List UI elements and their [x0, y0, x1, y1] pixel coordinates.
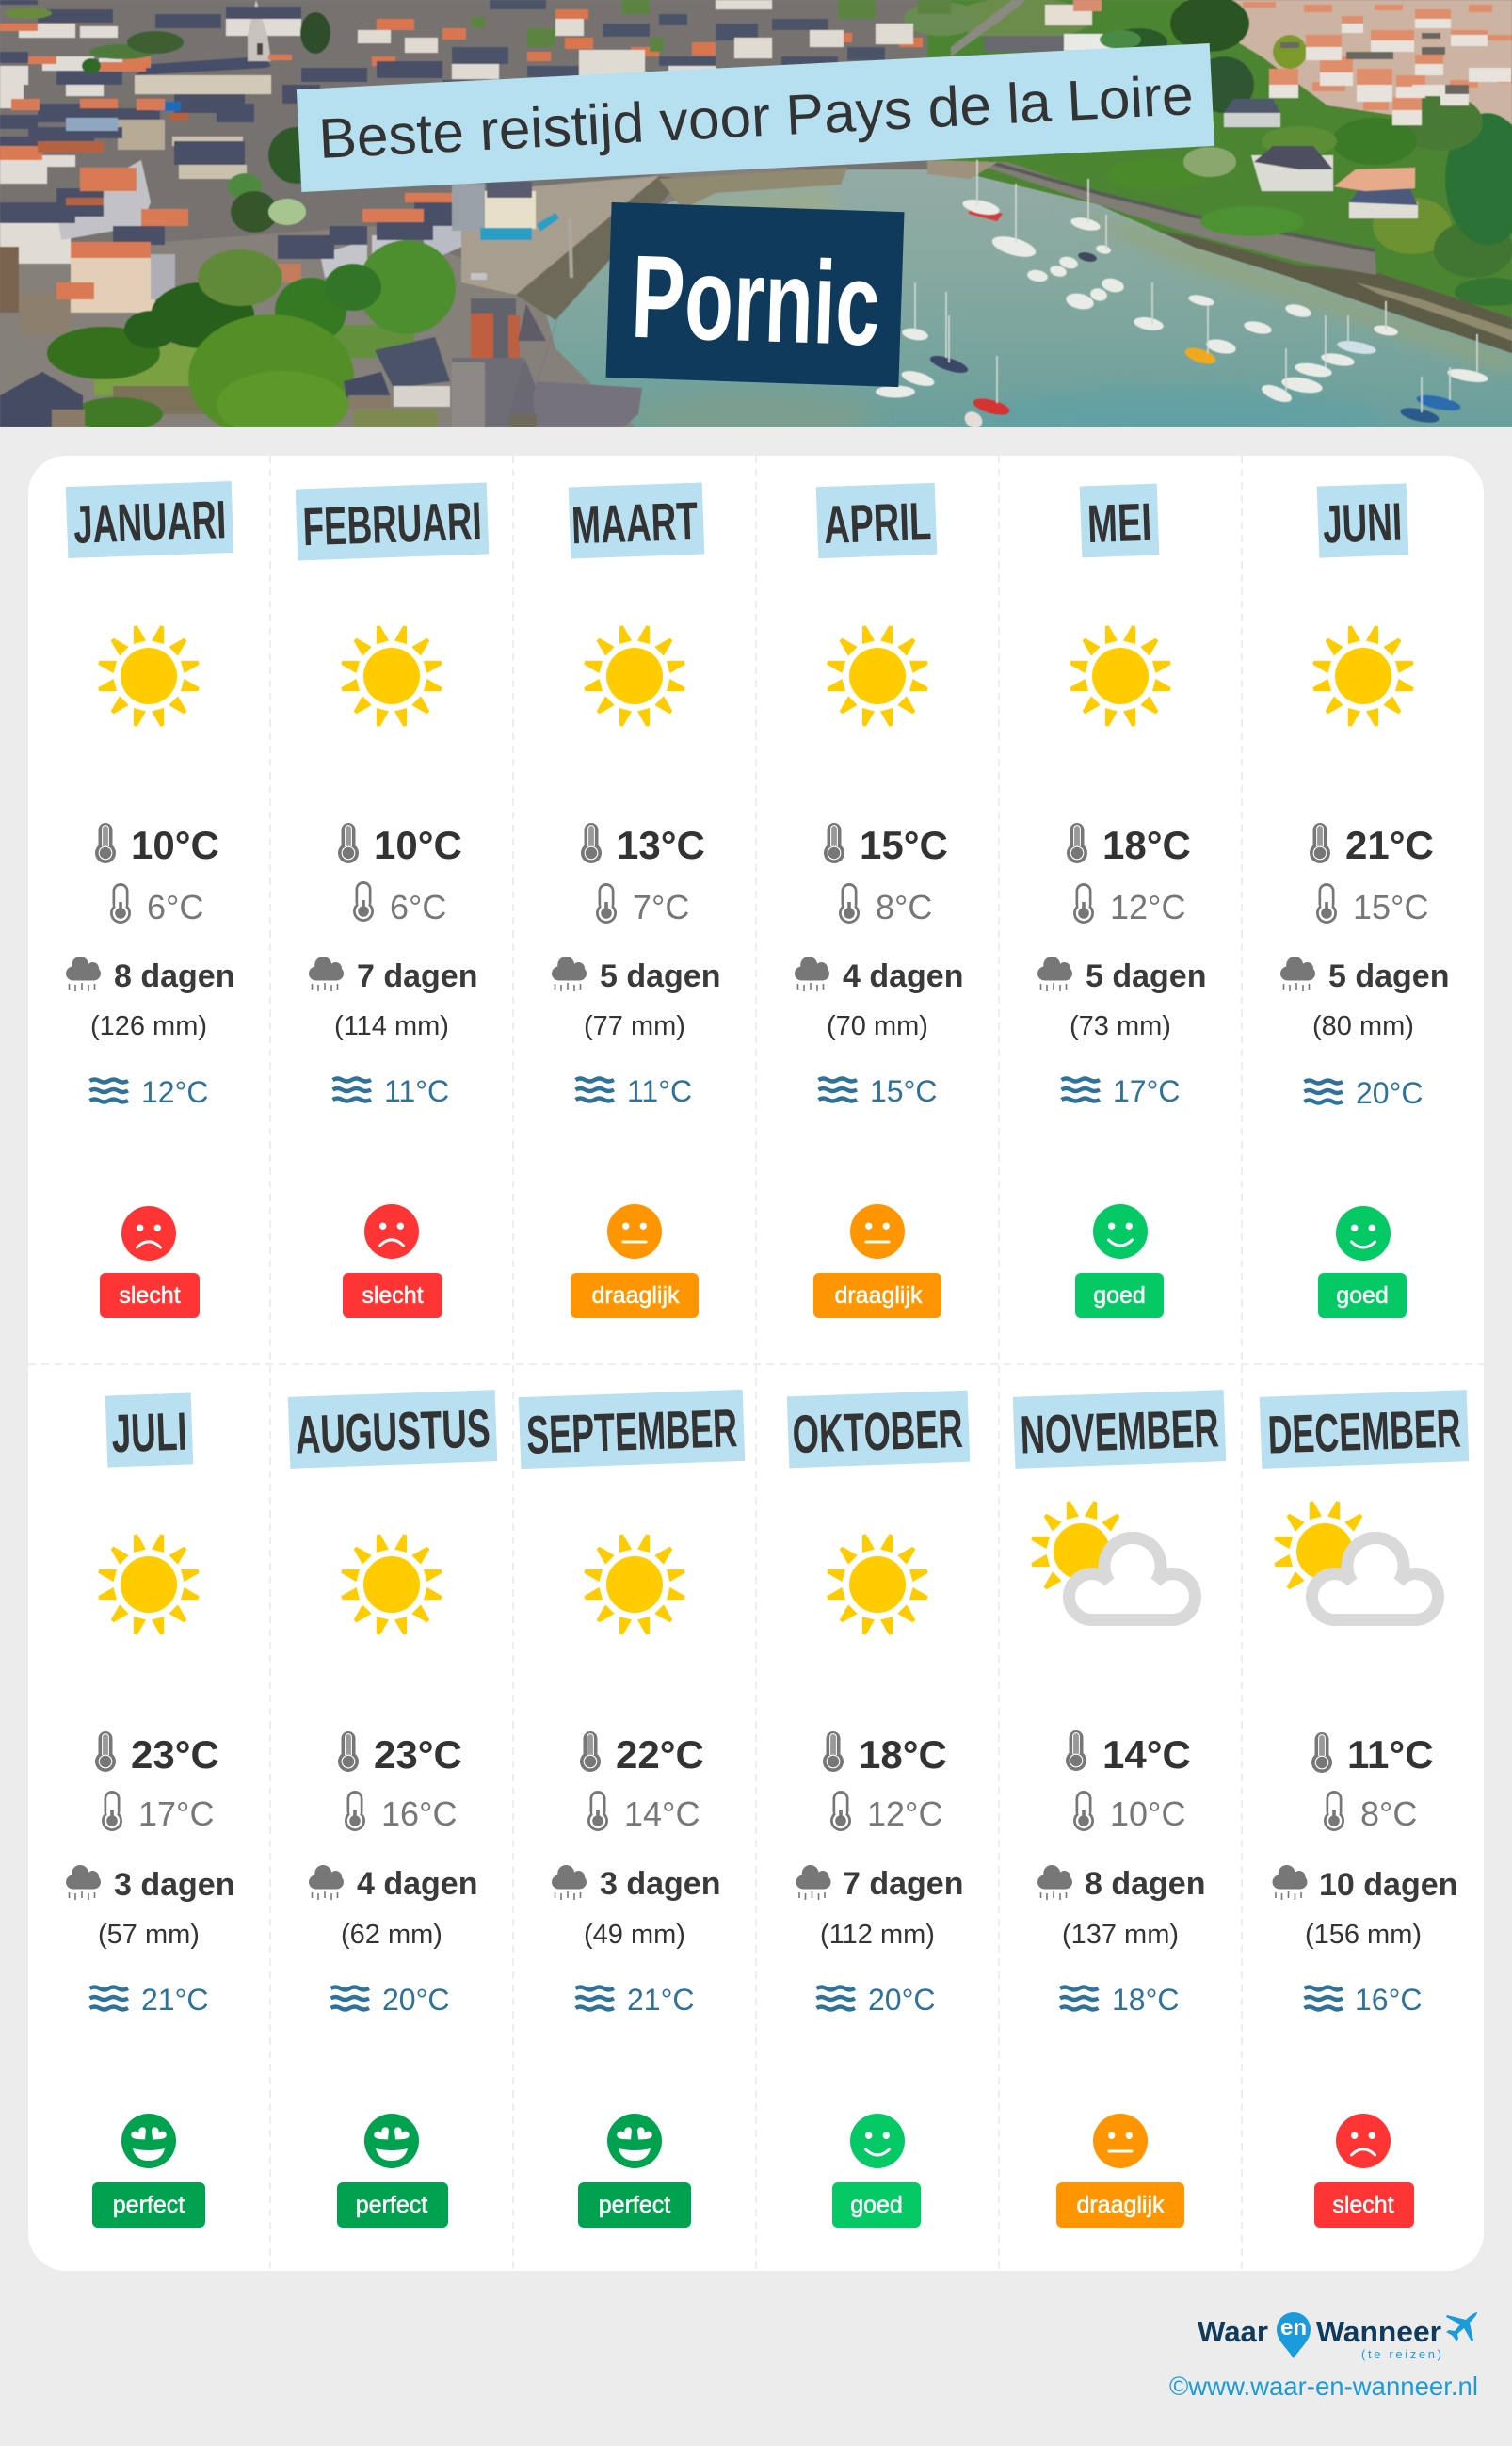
sea temperature: 20°C [1356, 1076, 1424, 1110]
month column: januari [66, 481, 234, 1318]
month label: AUGUSTUS [295, 1398, 491, 1466]
icon: sun [340, 1533, 443, 1636]
rating: goed [832, 2114, 921, 2228]
month column: december [1260, 1390, 1469, 2228]
rain days [795, 957, 963, 994]
month label: FEBRUARI [302, 491, 483, 557]
month label: APRIL [823, 491, 932, 555]
rainfall: (80 mm) [1312, 1011, 1414, 1041]
sea temperature [817, 1983, 936, 2017]
min temperature: 6°C [390, 888, 446, 926]
month label [816, 483, 937, 558]
month column: februari [296, 482, 489, 1318]
title banner: Beste reistijd voor Pays de la Loire [317, 63, 1195, 170]
rainfall: (49 mm) [584, 1920, 685, 1950]
rain days: 7 dagen [843, 1866, 963, 1902]
left town walls [0, 19, 301, 264]
sea temperature: 21°C [141, 1983, 209, 2017]
rainfall: (156 mm) [1305, 1920, 1422, 1950]
month column: april [795, 483, 963, 1318]
title banner [297, 43, 1214, 192]
month label [296, 482, 489, 561]
max temperature [1066, 1730, 1191, 1777]
min temperature: 17°C [138, 1794, 214, 1833]
sea temperature [1305, 1983, 1422, 2017]
rating: draaglijk [813, 1204, 941, 1318]
month label: MAART [571, 491, 699, 555]
rainfall: (114 mm) [334, 1011, 449, 1041]
rain days: 8 dagen [1085, 1866, 1205, 1902]
rating: goed: goed [1336, 1282, 1389, 1309]
rating: goed [1318, 1206, 1407, 1318]
max temperature: 23°C [374, 1732, 462, 1777]
max temperature: 14°C [1102, 1732, 1191, 1777]
rain days [66, 1865, 234, 1903]
month label: MEI [1086, 492, 1152, 555]
sea temperature: 21°C [627, 1983, 695, 2017]
rating: draaglijk: draaglijk [591, 1282, 680, 1309]
month label [288, 1390, 497, 1469]
min temperature: 12°C [1110, 888, 1185, 926]
min temperature: 8°C [1360, 1794, 1417, 1833]
rating: perfect: perfect [113, 2192, 185, 2218]
bottom houses [0, 372, 83, 427]
city name block: Pornic [606, 202, 904, 387]
logo: Waar en Wanneer: Wanneer [1316, 2315, 1441, 2348]
max temperature [580, 1731, 704, 1777]
rating: draaglijk: draaglijk [834, 1282, 923, 1309]
sea temperature: 11°C [384, 1074, 449, 1108]
tower and turrets [471, 298, 516, 364]
rating: slecht [343, 1204, 442, 1318]
icon: sun [340, 624, 443, 728]
icon: sun [826, 1533, 929, 1636]
rating: slecht: slecht [1332, 2192, 1394, 2218]
rating: slecht: slecht [119, 1282, 181, 1309]
month label: JANUARI [72, 490, 227, 555]
panel: climate table [28, 456, 1484, 2271]
max temperature: 18°C [859, 1732, 947, 1777]
month label: JUNI [1322, 492, 1403, 555]
houses on the right bank [1251, 155, 1333, 191]
water base [546, 169, 1512, 427]
max temperature [95, 1731, 219, 1777]
month column: mei [1037, 484, 1206, 1318]
month column: oktober [787, 1391, 970, 2228]
max temperature [338, 1731, 462, 1777]
rating: slecht [1314, 2114, 1414, 2228]
rain days [309, 957, 477, 994]
sea temperature [819, 1074, 938, 1108]
icon: sun [1069, 624, 1172, 728]
min temperature [1316, 883, 1428, 926]
rating: goed: goed [1093, 1282, 1146, 1309]
sea temperature: 18°C [1112, 1983, 1179, 2017]
icon: sun [583, 624, 686, 728]
icon: airplane [1446, 2312, 1477, 2341]
rain days: 5 dagen [1328, 958, 1449, 994]
month column: september [519, 1390, 745, 2228]
sea temperature: 20°C [868, 1983, 936, 2017]
sea temperature: 16°C [1355, 1983, 1422, 2017]
rating: goed [1075, 1204, 1164, 1318]
min temperature [353, 881, 446, 926]
sea temperature: 11°C [627, 1074, 692, 1108]
month label [105, 1392, 193, 1468]
rainfall: (126 mm) [90, 1011, 207, 1041]
right land base [927, 0, 1512, 353]
rainfall: (112 mm) [820, 1920, 935, 1950]
min temperature [596, 883, 689, 926]
sea temperature: 20°C [382, 1983, 450, 2017]
rating: goed: goed [850, 2192, 903, 2218]
min temperature: 16°C [381, 1794, 457, 1833]
rain days [552, 1865, 720, 1902]
sea temperature: 12°C [141, 1075, 209, 1109]
month label [569, 483, 704, 558]
icon: sun [97, 624, 201, 728]
city name block: Pornic: Pornic [630, 232, 882, 370]
rocky shore [1158, 231, 1512, 353]
sea temperature: 15°C [870, 1074, 938, 1108]
rating: perfect: perfect [356, 2192, 427, 2218]
max temperature: 15°C [860, 823, 948, 867]
month label [66, 481, 233, 558]
min temperature: 14°C [624, 1794, 700, 1833]
month label: SEPTEMBER [525, 1398, 738, 1466]
min temperature [1073, 883, 1185, 926]
rain days: 7 dagen [357, 958, 477, 994]
rain days [1037, 957, 1206, 994]
sea temperature [576, 1983, 695, 2017]
min temperature [830, 1791, 942, 1833]
month label: NOVEMBER [1020, 1398, 1220, 1466]
max temperature: 11°C [1347, 1732, 1434, 1777]
month label [1317, 483, 1408, 558]
icon: sun [1311, 624, 1415, 728]
month label [1080, 484, 1159, 557]
sea temperature [576, 1074, 692, 1108]
rain days: 3 dagen [114, 1867, 234, 1903]
rainfall: (57 mm) [98, 1920, 200, 1950]
sea temperature [333, 1074, 449, 1108]
rating: draaglijk [1056, 2114, 1184, 2228]
website url: ©www.waar-en-wanneer.nl [1169, 2372, 1478, 2401]
plaza and harbour quay [461, 176, 659, 295]
canal, road and buildings top centre [951, 0, 1026, 56]
logo: Waar en Wanneer: en [1280, 2315, 1307, 2341]
left town orange roofs [0, 24, 452, 299]
min temperature [1324, 1791, 1417, 1833]
min temperature [839, 883, 932, 926]
vegetation on the right bank [1373, 198, 1452, 254]
icon: sun [97, 1533, 201, 1636]
month label: JULI [111, 1402, 188, 1464]
sea temperature [331, 1983, 450, 2017]
icon: sun behind cloud [1273, 1500, 1439, 1619]
rain days: 5 dagen [600, 958, 720, 994]
sea temperature [90, 1075, 209, 1109]
stone quay wall [970, 162, 1376, 275]
month column: juli [66, 1392, 234, 2228]
rating: slecht: slecht [362, 1282, 424, 1309]
rainfall: (137 mm) [1062, 1920, 1179, 1950]
max temperature: 10°C [374, 823, 462, 867]
min temperature: 12°C [867, 1794, 942, 1833]
icon: sun [826, 624, 929, 728]
icon: sun behind cloud [1030, 1500, 1196, 1619]
sea temperature [1305, 1076, 1424, 1110]
max temperature: 23°C [131, 1732, 219, 1777]
rating: perfect [337, 2114, 448, 2228]
month label [519, 1390, 745, 1469]
logo: Waar en Wanneer: Waar [1198, 2315, 1268, 2348]
left town slate roofs [0, 0, 461, 259]
icon: sun [583, 1533, 686, 1636]
max temperature [823, 1731, 947, 1777]
rain days: 3 dagen [600, 1866, 720, 1902]
max temperature: 21°C [1345, 823, 1434, 867]
rainfall: (77 mm) [584, 1011, 685, 1041]
min temperature: 7°C [633, 888, 689, 926]
sea temperature [90, 1983, 209, 2017]
rating: perfect: perfect [599, 2192, 670, 2218]
rating: perfect [92, 2114, 205, 2228]
rainfall: (70 mm) [827, 1011, 928, 1041]
rain days [309, 1865, 477, 1902]
max temperature: 10°C [131, 823, 219, 867]
month label [1013, 1390, 1226, 1469]
max temperature: 13°C [617, 823, 705, 867]
rating: draaglijk: draaglijk [1076, 2192, 1165, 2218]
min temperature: 6°C [147, 888, 203, 926]
month label [787, 1391, 970, 1468]
rain days: 4 dagen [843, 958, 963, 994]
icon: map pin [1277, 2312, 1311, 2358]
rain days: 4 dagen [357, 1866, 477, 1902]
rating: perfect [578, 2114, 691, 2228]
rating: slecht [100, 1206, 200, 1318]
hero photo: aerial view of Pornic harbour [0, 0, 1512, 447]
boats [968, 210, 1004, 222]
min temperature: 8°C [876, 888, 932, 926]
max temperature: 18°C [1102, 823, 1191, 867]
rain days [1280, 957, 1449, 994]
rainfall: (73 mm) [1070, 1011, 1171, 1041]
month label: OKTOBER [792, 1399, 964, 1465]
middle town roofs [442, 0, 885, 83]
rainfall: (62 mm) [341, 1920, 442, 1950]
rain days: 8 dagen [114, 958, 234, 994]
month column: juni [1280, 483, 1449, 1318]
rating: draaglijk [571, 1204, 699, 1318]
rain days: 10 dagen [1319, 1867, 1457, 1903]
min temperature [345, 1791, 457, 1833]
min temperature: 15°C [1353, 888, 1428, 926]
sea temperature [1062, 1074, 1181, 1108]
month column: augustus [288, 1390, 497, 2228]
max temperature: 22°C [616, 1732, 704, 1777]
top left town colour base [0, 0, 928, 257]
rain days [66, 957, 234, 994]
logo: Waar en Wanneer [1198, 2312, 1477, 2361]
month column: maart [552, 483, 720, 1318]
month column: november [1013, 1390, 1226, 2228]
church [135, 56, 271, 75]
min temperature [110, 883, 203, 926]
logo: Waar en Wanneer: (te reizen) [1361, 2347, 1441, 2361]
sea temperature [1060, 1983, 1179, 2017]
rain days [552, 957, 720, 994]
min temperature: 10°C [1110, 1794, 1185, 1833]
min temperature [102, 1791, 214, 1833]
min temperature [1073, 1791, 1185, 1833]
rain days: 5 dagen [1086, 958, 1206, 994]
left trees and lawns [89, 44, 155, 59]
sea temperature: 17°C [1113, 1074, 1181, 1108]
min temperature [587, 1791, 700, 1833]
